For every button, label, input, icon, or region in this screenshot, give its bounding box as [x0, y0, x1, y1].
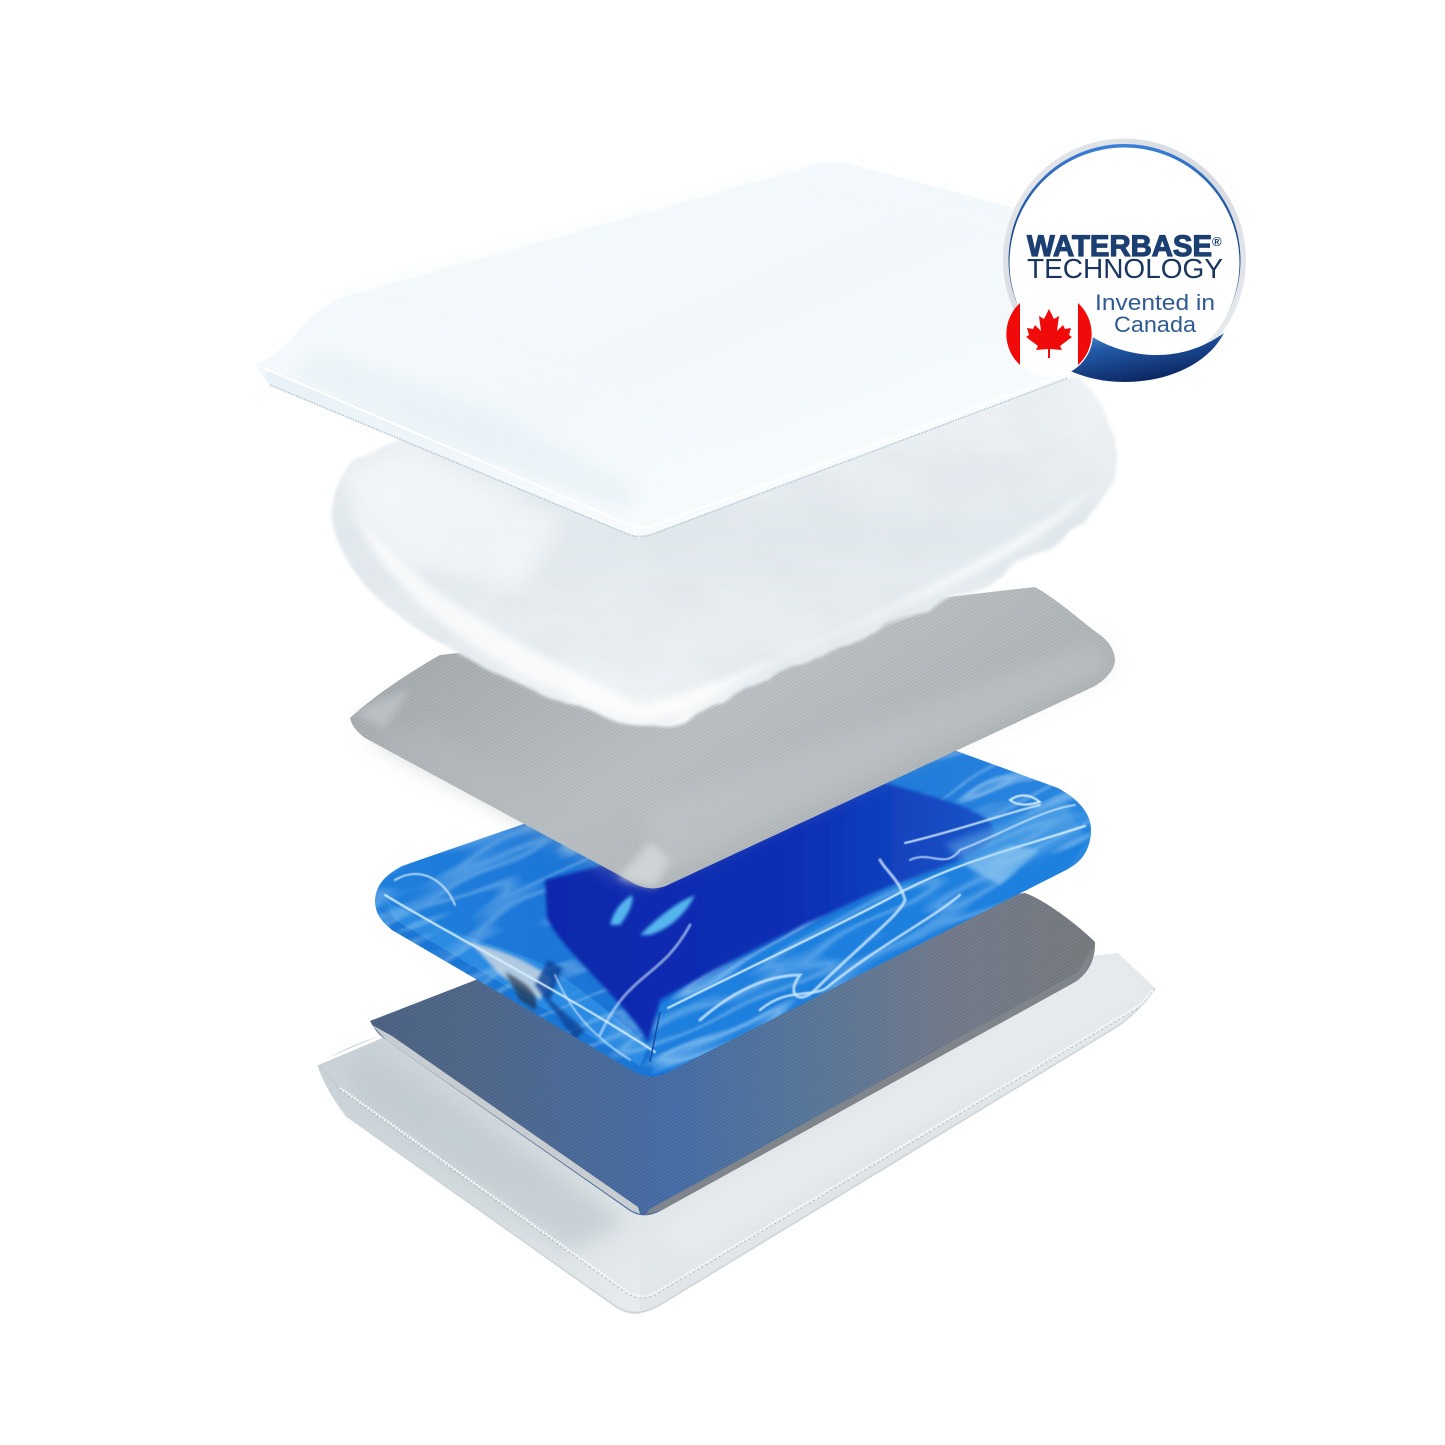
- badge: Waterbase Technology: [1003, 138, 1246, 382]
- badge note: Canada: [1114, 312, 1197, 337]
- gel lower-right bevel: [645, 815, 1092, 1076]
- cover stitched edge: [264, 368, 1072, 528]
- icon: Canadian flag: [1006, 291, 1093, 377]
- layer: blue gel pack: [375, 750, 1092, 1077]
- badge swoosh: [1068, 328, 1224, 382]
- gel lower-left bevel: [380, 908, 655, 1076]
- gel glass reflection: [470, 942, 552, 1000]
- badge note: [1095, 290, 1215, 337]
- icon: maple leaf: [1026, 309, 1072, 358]
- layer: fluffy fill: [320, 370, 1130, 740]
- gel bright glints: [610, 895, 632, 925]
- layer: grey-blue sheet: [370, 893, 1095, 1215]
- top cover front left panel: [265, 372, 655, 538]
- sheet dark edge: [645, 944, 1095, 1215]
- fluff shape: [333, 378, 1115, 727]
- layer: top cover: [256, 162, 1105, 538]
- badge subheading: TECHNOLOGY: [1027, 253, 1223, 284]
- sheet light edge: [372, 1025, 640, 1214]
- gel ripples: [385, 795, 1085, 1060]
- badge heading: WATERBASE: [1027, 230, 1212, 263]
- registered mark: ®: [1212, 234, 1222, 249]
- fluff texture: [776, 616, 911, 674]
- badge note: Invented in: [1095, 290, 1215, 315]
- badge disc: [1003, 138, 1246, 382]
- gel water caustics: [375, 751, 1091, 1072]
- exploded pillow diagram with badge: [256, 138, 1246, 1314]
- gel deep blue centre: [545, 765, 993, 1042]
- stitched seam: [340, 990, 1153, 1296]
- layer: silver sheet: [350, 587, 1115, 888]
- fluff soft highlights: [350, 490, 1090, 720]
- gel upper-right pale area: [945, 800, 1085, 880]
- silver sheet highlights: [365, 730, 650, 885]
- layer: bottom cover: [317, 953, 1155, 1315]
